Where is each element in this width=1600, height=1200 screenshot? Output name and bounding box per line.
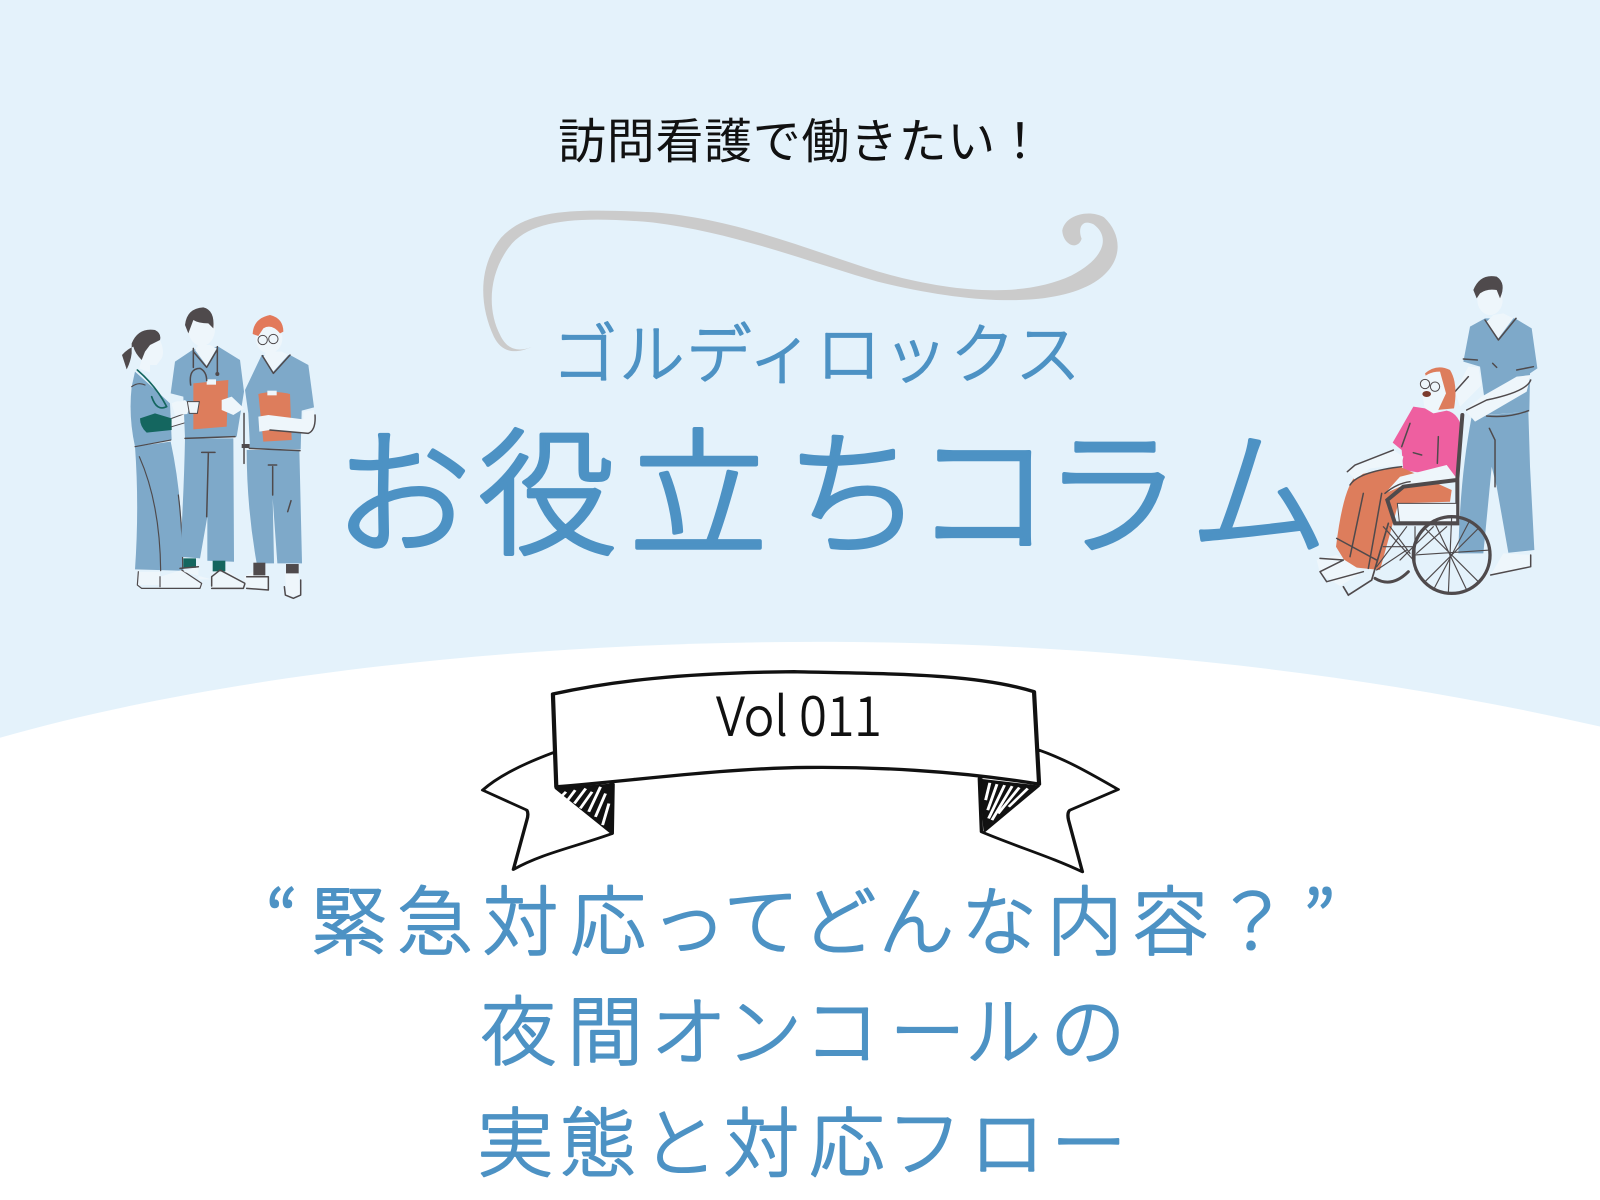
ribbon tail: left xyxy=(483,753,613,870)
closing quote: ” xyxy=(1303,857,1336,972)
nurse: woman xyxy=(122,330,202,588)
illustration: three nurses xyxy=(122,307,315,598)
nurse: man with clipboard xyxy=(171,307,245,588)
caregiver xyxy=(1455,276,1537,575)
wheelchair xyxy=(1343,415,1490,595)
headline line 2: 夜間オンコールの xyxy=(481,971,1126,1081)
headline line 3: 実態と対応フロー xyxy=(478,1082,1127,1192)
volume label: Vol 011 xyxy=(716,675,882,752)
ribbon fold shading: left xyxy=(555,784,613,834)
headline line 1: 緊急対応ってどんな内容？ xyxy=(311,861,1290,971)
ribbon banner xyxy=(483,672,1118,872)
nurse: man with glasses xyxy=(242,315,315,598)
main title: お役立ちコラム: お役立ちコラム xyxy=(334,384,1328,584)
patient xyxy=(1317,367,1463,586)
white curved lower panel xyxy=(0,642,1600,1200)
ribbon fold shading: right xyxy=(980,779,1039,832)
decorative swirl xyxy=(483,211,1118,351)
ribbon tail: right xyxy=(979,750,1118,872)
subtitle: ゴルディロックス: ゴルディロックス xyxy=(552,302,1081,397)
ribbon main band xyxy=(553,672,1039,787)
illustration: caregiver pushing patient in wheelchair xyxy=(1317,276,1537,595)
heading: 訪問看護で働きたい！: 訪問看護で働きたい！ xyxy=(558,102,1044,172)
opening quote: “ xyxy=(265,857,298,972)
